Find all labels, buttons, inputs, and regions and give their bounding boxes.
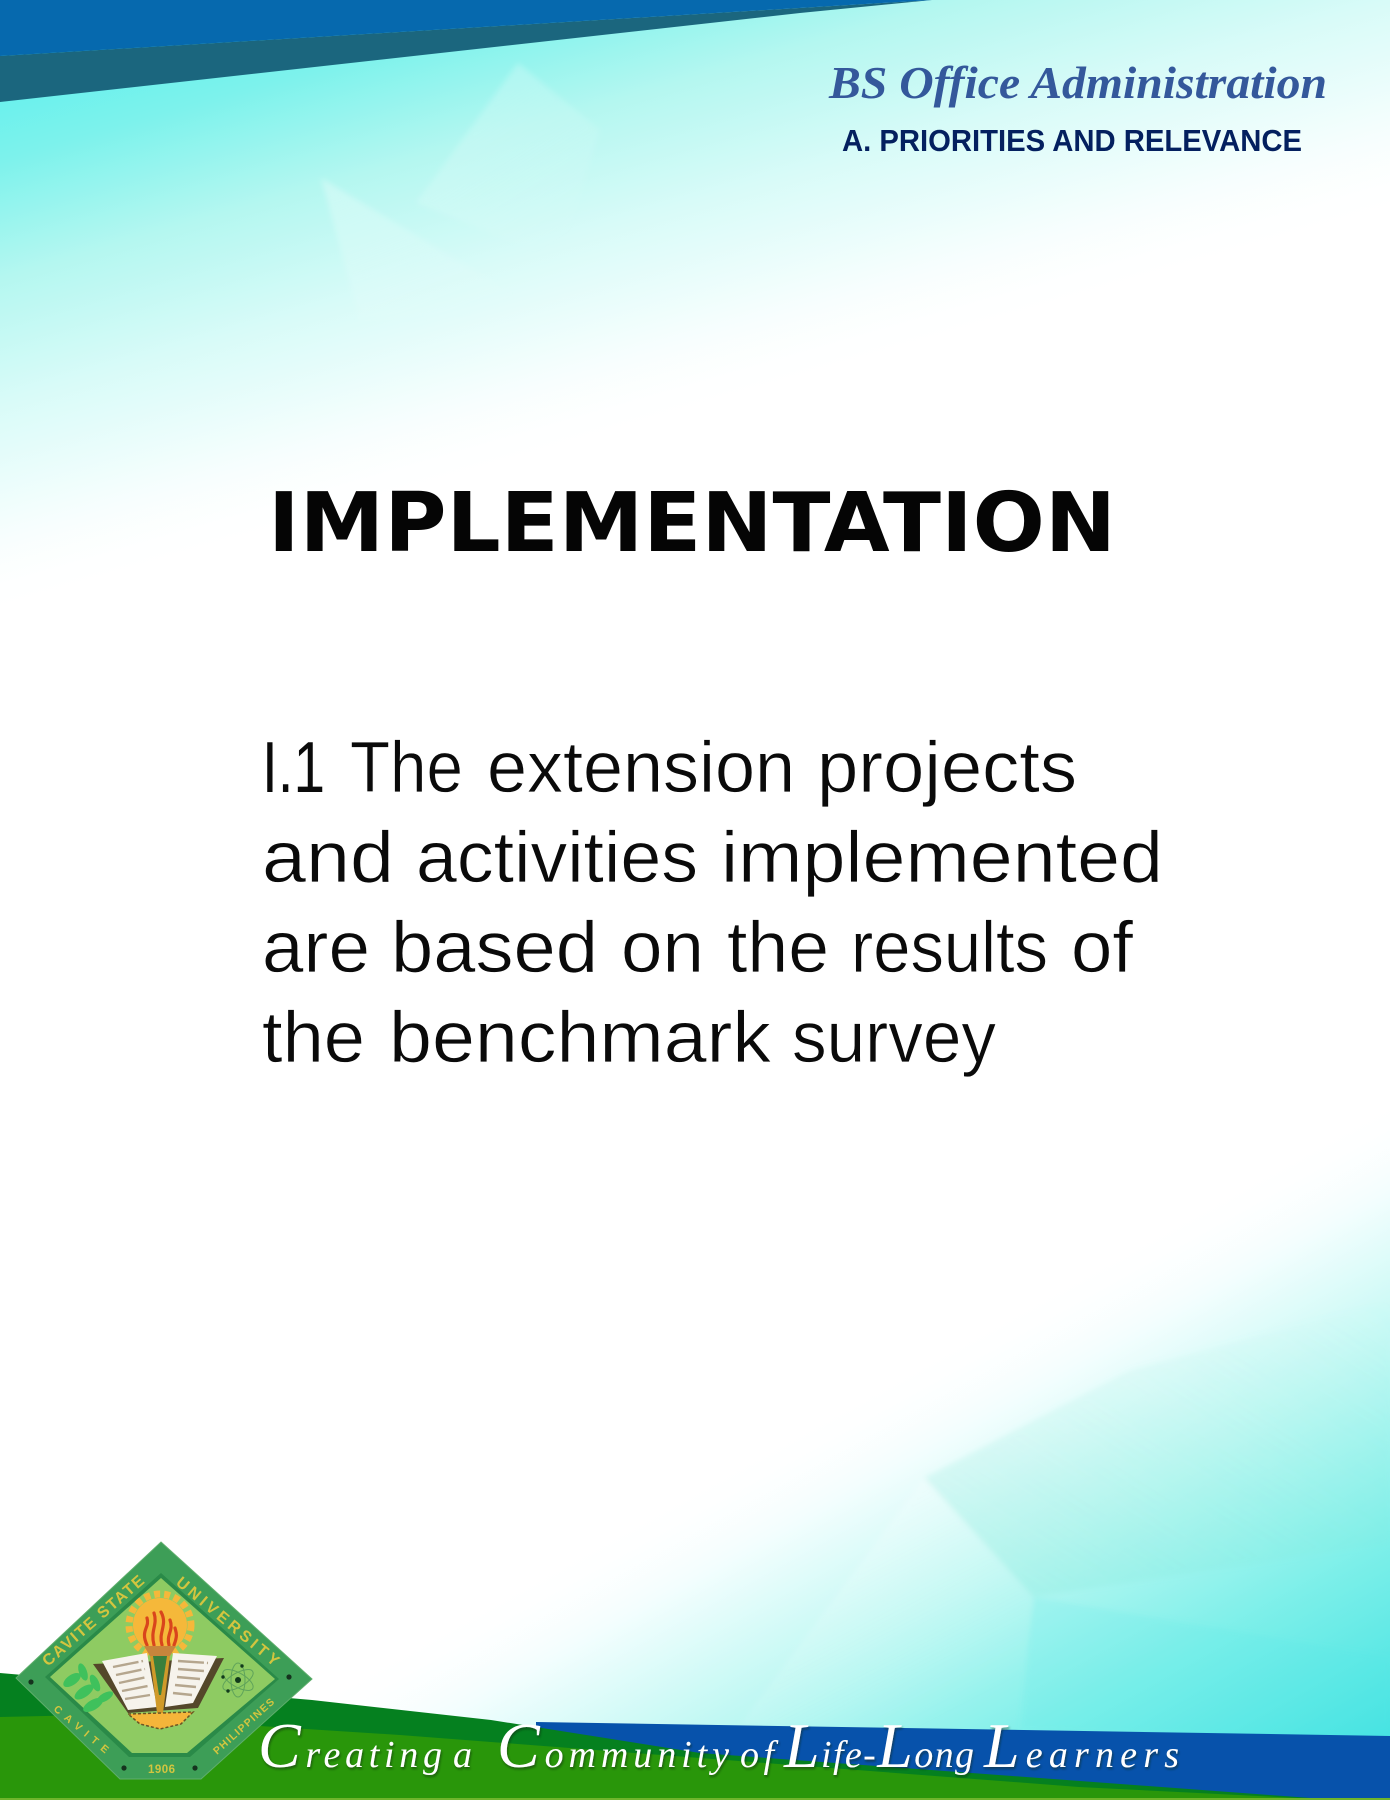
body statement: benchmark bbox=[389, 998, 772, 1078]
icon: torch handle bbox=[144, 1646, 176, 1713]
slogan: a bbox=[453, 1734, 472, 1776]
seal lettering: 1906 bbox=[148, 1764, 175, 1776]
body statement: activities bbox=[416, 818, 698, 898]
seal lettering bbox=[39, 1572, 282, 1776]
body statement: The bbox=[350, 728, 463, 808]
university seal bbox=[16, 1542, 312, 1779]
body statement: of bbox=[1071, 908, 1134, 988]
footer band bbox=[0, 1673, 1390, 1800]
seal lettering: CAVITE STATE bbox=[39, 1572, 148, 1670]
icon: gear base bbox=[128, 1712, 193, 1729]
seal lettering: PHILIPPINES bbox=[211, 1696, 277, 1757]
slogan bbox=[258, 1710, 1179, 1781]
seal inner ring bbox=[45, 1573, 279, 1757]
body statement: extension bbox=[487, 728, 795, 808]
icon: leaves bbox=[61, 1662, 115, 1715]
seal lettering: CAVITE bbox=[51, 1703, 111, 1756]
slogan: Life-Long bbox=[783, 1710, 974, 1781]
body statement: and bbox=[262, 818, 394, 898]
slogan: of bbox=[740, 1734, 778, 1776]
slogan: Community bbox=[497, 1710, 729, 1781]
body statement: results bbox=[851, 908, 1048, 988]
body statement bbox=[262, 728, 1163, 1078]
slogan: Creating bbox=[258, 1710, 442, 1781]
body statement: on bbox=[621, 908, 704, 988]
body statement: projects bbox=[817, 728, 1077, 808]
seal lettering: UNIVERSITY bbox=[172, 1574, 282, 1670]
seal outer band bbox=[16, 1542, 312, 1779]
body statement: survey bbox=[792, 998, 996, 1078]
header: area label: A. PRIORITIES AND RELEVANCE bbox=[842, 123, 1302, 158]
body statement: I.1 bbox=[262, 728, 325, 808]
header: programme name: BS Office Administration bbox=[828, 57, 1327, 108]
icon: torch flame bbox=[144, 1612, 176, 1645]
seal inner field bbox=[50, 1578, 275, 1753]
seal rivets bbox=[28, 1674, 292, 1771]
body statement: the bbox=[262, 998, 365, 1078]
icon: sunburst bbox=[129, 1594, 191, 1656]
body statement: based bbox=[391, 908, 598, 988]
title: IMPLEMENTATION bbox=[268, 476, 1116, 571]
slogan: Learners bbox=[983, 1710, 1179, 1781]
body statement: implemented bbox=[721, 818, 1163, 898]
body statement: the bbox=[727, 908, 829, 988]
top banner bbox=[0, 0, 932, 102]
icon: atom bbox=[220, 1663, 256, 1697]
icon: open book bbox=[93, 1653, 224, 1713]
body statement: are bbox=[262, 908, 370, 988]
